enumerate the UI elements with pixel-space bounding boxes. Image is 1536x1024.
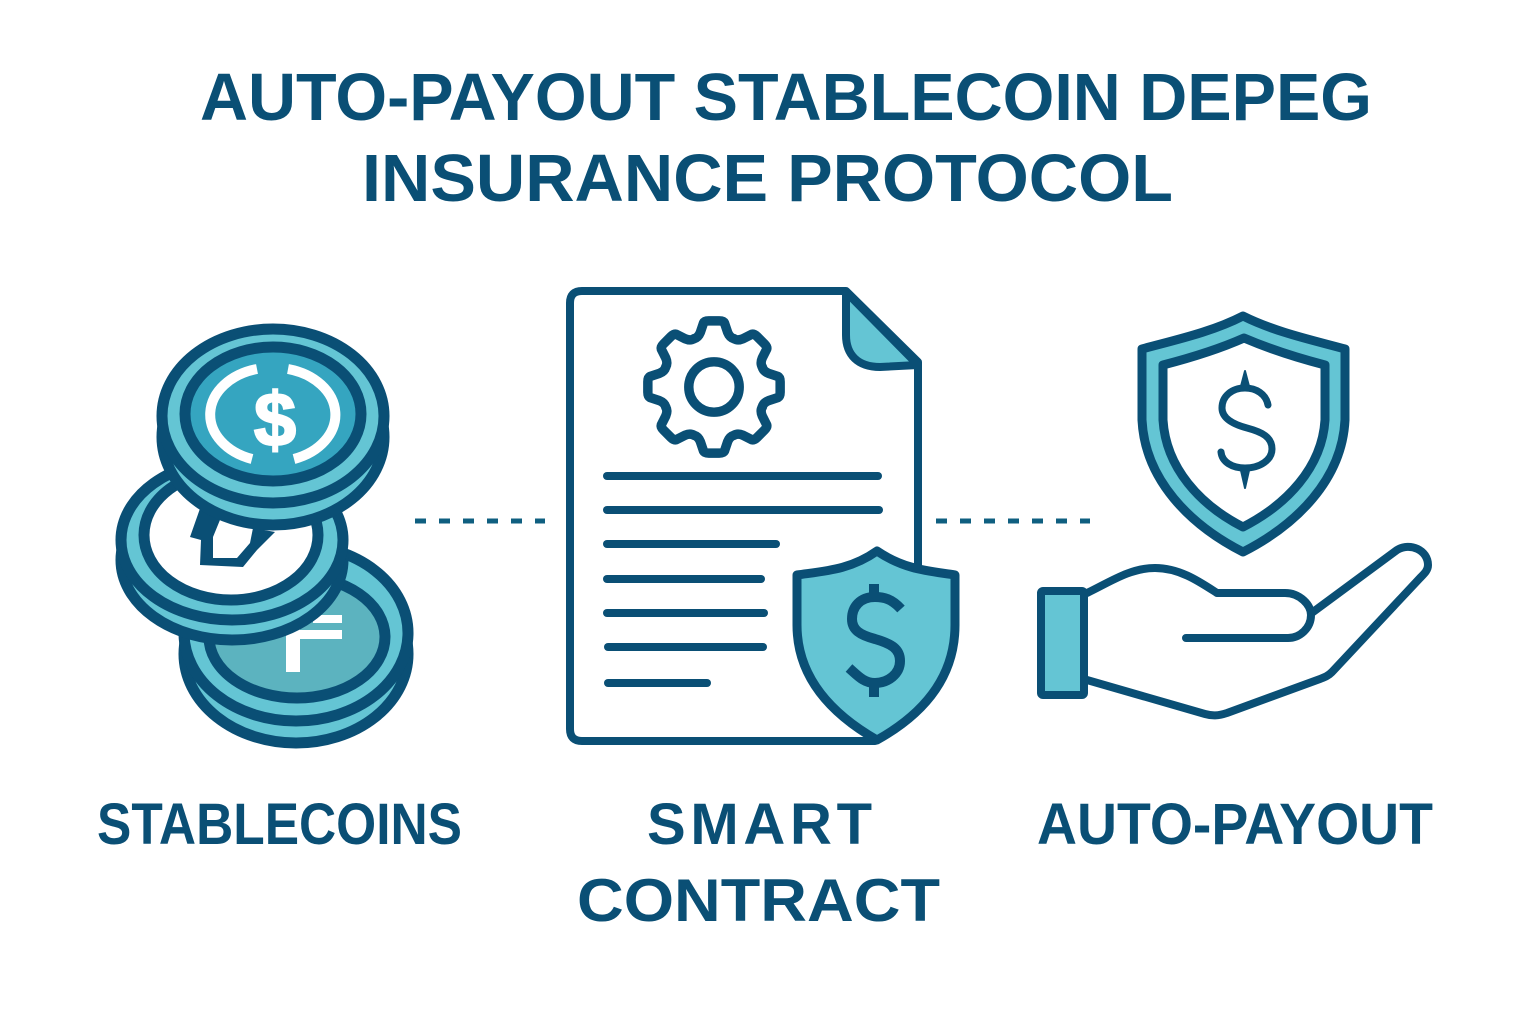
title: AUTO-PAYOUT STABLECOIN DEPEG bbox=[200, 60, 1372, 135]
document page bbox=[570, 291, 918, 741]
label: smart contract: SMART bbox=[647, 792, 872, 857]
icon: payout shield and hand bbox=[1041, 316, 1428, 715]
connector: right dashed line bbox=[936, 518, 1090, 524]
icon: stablecoin stack bbox=[121, 329, 408, 743]
icon: gear bbox=[648, 321, 780, 453]
connector: left dashed line bbox=[415, 518, 545, 524]
shield bbox=[1142, 316, 1345, 552]
title bbox=[200, 60, 1372, 216]
coin: middle bbox=[121, 460, 343, 640]
page fold bbox=[846, 292, 918, 367]
label: stablecoins: STABLECOINS bbox=[97, 792, 462, 857]
label: smart contract bbox=[577, 792, 940, 934]
title: INSURANCE PROTOCOL bbox=[362, 141, 1173, 216]
icon: shield with dollar bbox=[797, 551, 955, 740]
cuff bbox=[1041, 591, 1084, 695]
icon: smart contract document bbox=[570, 291, 955, 741]
coin: top bbox=[162, 329, 384, 525]
label: auto-payout: AUTO-PAYOUT bbox=[1037, 792, 1433, 857]
coin: bottom bbox=[184, 545, 408, 743]
coin: top: $ bbox=[254, 378, 296, 463]
document text lines bbox=[607, 476, 879, 683]
label: smart contract: CONTRACT bbox=[577, 867, 940, 934]
hand bbox=[1087, 547, 1428, 715]
